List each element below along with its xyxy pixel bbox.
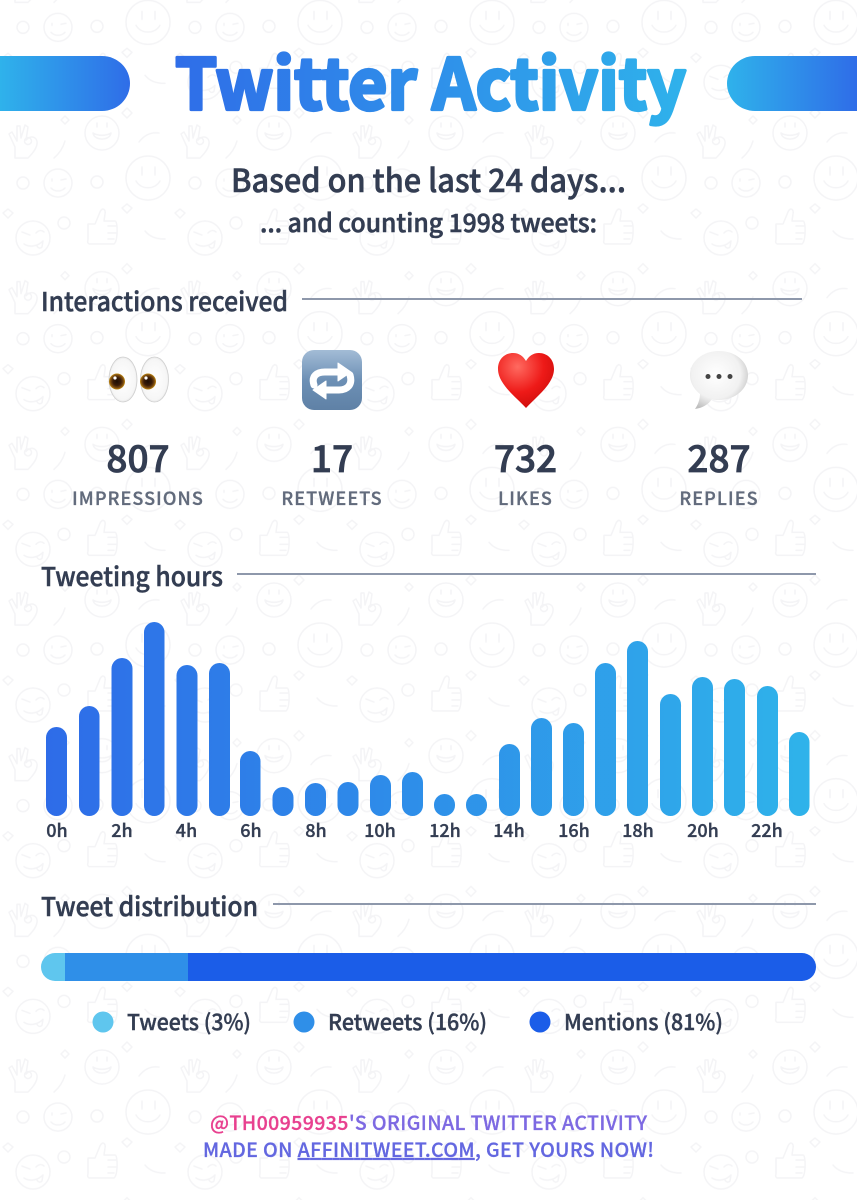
left pill — [0, 56, 130, 111]
hour axis labels: 6h — [240, 817, 262, 843]
icon: retweet arrows — [302, 350, 362, 410]
legend: mentions: Mentions (81%) — [564, 1005, 723, 1037]
legend: tweets: Tweets (3%) — [127, 1005, 251, 1037]
footer credit: MADE ON AFFINITWEET.COM, GET YOURS NOW! — [203, 1134, 654, 1163]
subtitle: ... and counting 1998 tweets: — [260, 204, 597, 240]
hour axis labels: 0h — [46, 817, 68, 843]
hour axis labels: 20h — [687, 817, 719, 843]
icon: eyes — [109, 357, 168, 402]
icon: speech bubble — [690, 351, 748, 409]
bar chart: tweeting hours — [46, 622, 810, 843]
stat: likes — [494, 353, 557, 511]
stat: impressions — [72, 357, 204, 511]
icon: heart — [498, 353, 554, 408]
section heading: interactions received: Interactions received — [41, 282, 288, 319]
stat: replies: REPLIES — [679, 485, 759, 511]
footer credit: @TH00959935'S ORIGINAL TWITTER ACTIVITY — [210, 1107, 647, 1136]
stat: replies — [679, 351, 759, 511]
right pill — [727, 56, 857, 111]
subtitle: Based on the last 24 days... — [231, 156, 626, 202]
panel: interactions — [72, 350, 759, 511]
stat: retweets: RETWEETS — [281, 485, 383, 511]
stat: retweets — [281, 350, 383, 511]
stacked bar: tweet distribution — [41, 953, 816, 981]
hour axis labels: 22h — [751, 817, 783, 843]
stat: impressions: IMPRESSIONS — [72, 485, 204, 511]
stat: impressions: 807 — [106, 429, 170, 483]
stat: likes: LIKES — [498, 485, 553, 511]
title: Twitter Activity — [175, 30, 686, 130]
hour axis labels: 4h — [176, 817, 197, 843]
stat: replies: 287 — [687, 429, 751, 483]
hour axis labels: 8h — [305, 817, 327, 843]
hour axis labels: 14h — [493, 817, 525, 843]
legend — [92, 1005, 723, 1037]
hour axis labels: 16h — [558, 817, 590, 843]
hour axis labels — [46, 817, 783, 843]
stat: likes: 732 — [494, 429, 557, 483]
hour axis labels: 10h — [364, 817, 396, 843]
subtitle — [231, 156, 626, 240]
hour axis labels: 2h — [111, 817, 133, 843]
hour axis labels: 18h — [622, 817, 654, 843]
footer credit — [203, 1107, 654, 1163]
legend: retweets: Retweets (16%) — [328, 1005, 487, 1037]
section heading: tweet distribution: Tweet distribution — [41, 887, 258, 924]
section heading: tweeting hours: Tweeting hours — [41, 557, 223, 594]
stat: retweets: 17 — [311, 429, 353, 483]
title banner — [0, 30, 857, 130]
hour axis labels: 12h — [429, 817, 461, 843]
